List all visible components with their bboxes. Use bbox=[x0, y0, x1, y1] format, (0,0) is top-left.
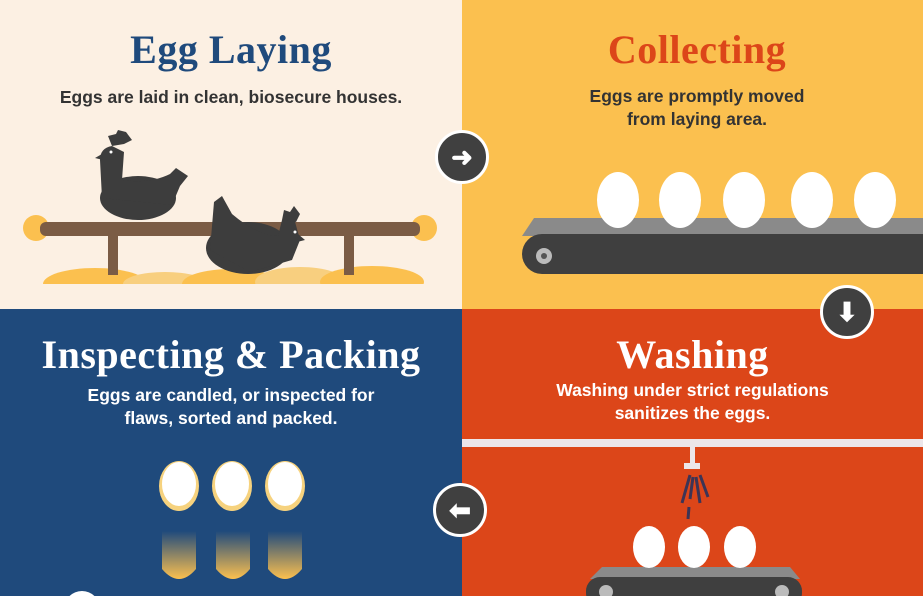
panel: washing bbox=[462, 309, 923, 596]
text: collecting bbox=[590, 86, 804, 129]
panel: inspecting & packing bbox=[0, 309, 462, 596]
text: collecting: from laying area. bbox=[627, 109, 767, 129]
illustration: candled eggs bbox=[70, 461, 305, 596]
illustration: hens on perch bbox=[23, 130, 437, 284]
text: inspecting: Eggs are candled, or inspected for bbox=[88, 385, 374, 405]
title: washing: Washing bbox=[616, 332, 769, 377]
arrow: left bbox=[433, 483, 487, 537]
arrow: right bbox=[435, 130, 489, 184]
text: inspecting bbox=[88, 385, 374, 428]
text: egg laying: Eggs are laid in clean, biosecure houses. bbox=[60, 87, 402, 107]
arrow: right: ➜ bbox=[451, 142, 473, 172]
title: inspecting & packing: Inspecting & Packing bbox=[42, 332, 420, 377]
illustration: conveyor with eggs bbox=[522, 172, 923, 274]
panel: egg laying bbox=[0, 0, 462, 309]
arrow: left: ⬅ bbox=[449, 495, 471, 525]
hen 2 bbox=[206, 222, 290, 274]
text: washing bbox=[556, 380, 829, 423]
panel: collecting bbox=[462, 0, 923, 309]
title: egg laying: Egg Laying bbox=[130, 27, 332, 72]
hen 1 bbox=[100, 176, 176, 220]
text: collecting: Eggs are promptly moved bbox=[590, 86, 804, 106]
text: inspecting: flaws, sorted and packed. bbox=[124, 408, 337, 428]
text: washing: Washing under strict regulations bbox=[556, 380, 829, 400]
illustration: washing conveyor bbox=[462, 439, 923, 596]
title: collecting: Collecting bbox=[608, 27, 786, 72]
text: washing: sanitizes the eggs. bbox=[615, 403, 770, 423]
arrow: down bbox=[820, 285, 874, 339]
arrow: down: ⬇ bbox=[836, 297, 858, 327]
